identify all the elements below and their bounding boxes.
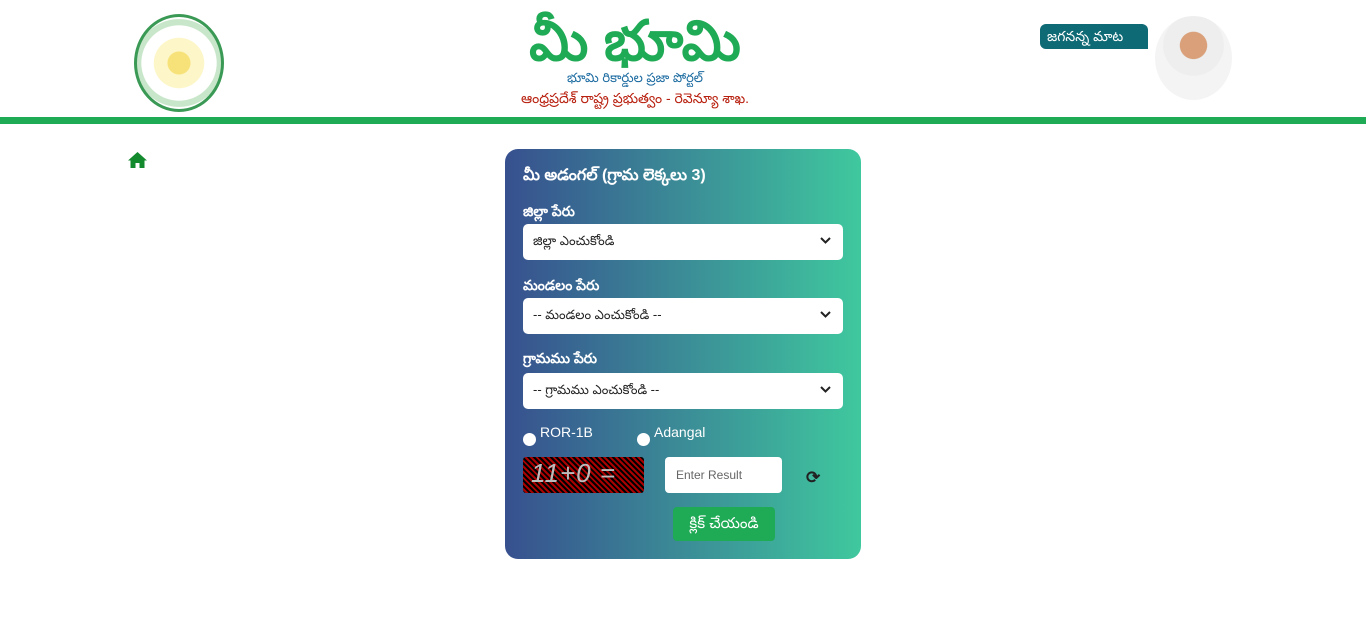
form heading: మీ అడంగల్ (గ్రామ లెక్కలు 3) — [523, 167, 706, 184]
emblem — [134, 14, 224, 112]
village select — [523, 373, 843, 409]
district select: జిల్లా ఎంచుకోండి — [533, 233, 614, 248]
icon: refresh: ⟳ — [806, 468, 820, 487]
radio Adangal: Adangal — [654, 424, 705, 440]
mandal select — [523, 298, 843, 334]
panel: form — [505, 149, 861, 559]
radio ROR — [523, 424, 593, 446]
radio ROR: ROR-1B — [540, 424, 593, 440]
village label: గ్రామము పేరు — [523, 350, 597, 366]
captcha: 11+0 = — [531, 458, 616, 488]
result input — [665, 457, 782, 493]
green bar — [0, 117, 1366, 124]
badge: జగనన్న మాట — [1047, 28, 1123, 44]
submit button — [673, 507, 775, 541]
mandal select: -- మండలం ఎంచుకోండి -- — [533, 307, 662, 322]
district select — [523, 224, 843, 260]
result input: Enter Result — [676, 468, 742, 482]
subtitle: భూమి రికార్డుల ప్రజా పోర్టల్ — [567, 70, 703, 85]
icon: home — [128, 152, 147, 168]
department: ఆంధ్రప్రదేశ్ రాష్ట్ర ప్రభుత్వం - రెవెన్యూ శాఖ. — [521, 90, 749, 106]
submit button: క్లిక్ చేయండి — [689, 515, 759, 532]
portrait — [1155, 16, 1232, 100]
district label: జిల్లా పేరు — [523, 203, 575, 219]
village select: -- గ్రామము ఎంచుకోండి -- — [533, 382, 659, 397]
badge — [1040, 24, 1148, 49]
radio Adangal — [637, 424, 705, 446]
title: మీ భూమి — [529, 9, 741, 72]
captcha — [523, 457, 644, 493]
mandal label: మండలం పేరు — [523, 277, 599, 293]
